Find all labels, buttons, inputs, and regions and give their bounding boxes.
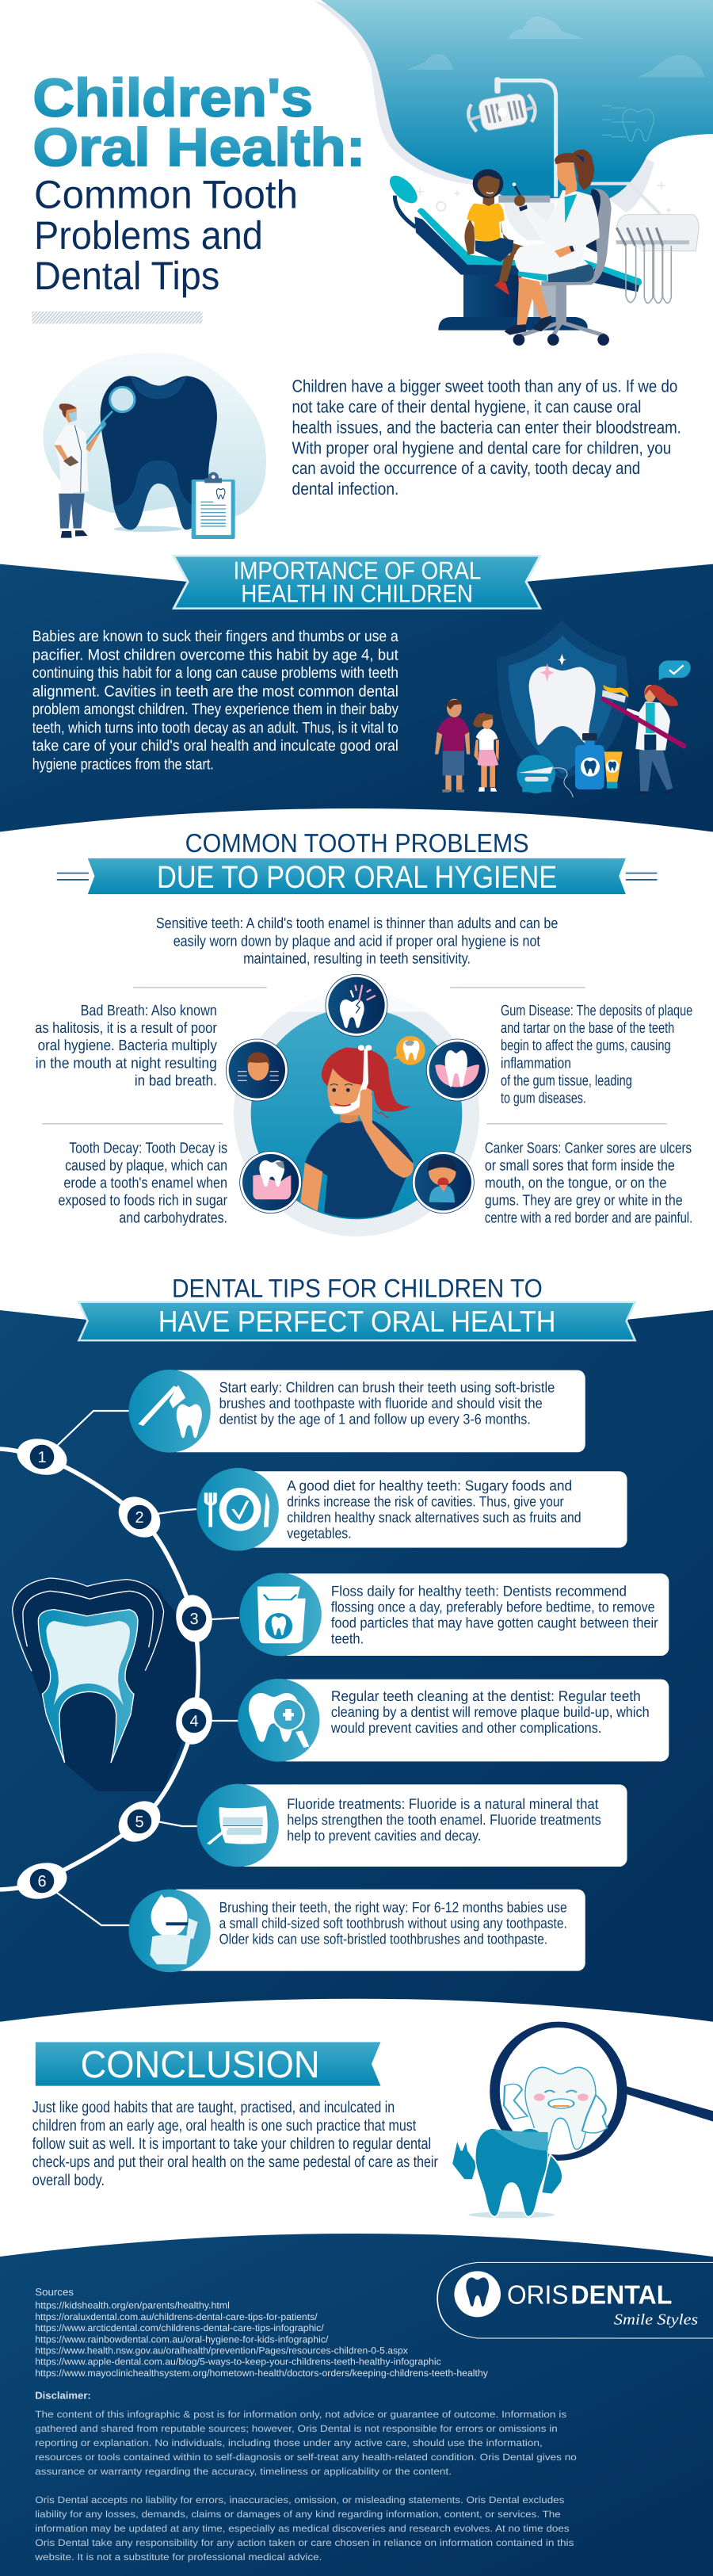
number 6: 6	[37, 1873, 47, 1890]
card: floss daily	[239, 1573, 669, 1656]
badge: sensitive tooth	[326, 974, 387, 1036]
dental unit	[616, 215, 699, 303]
badge: gum disease	[426, 1039, 488, 1101]
connector path	[0, 1411, 239, 1925]
panel: dental tips band background	[0, 1310, 713, 2022]
badge: canker sores	[412, 1152, 474, 1213]
text: tooth decay: Tooth Decay: Tooth Decay is	[69, 1139, 227, 1156]
text: sensitive teeth	[156, 915, 558, 967]
icon: teeth with applicator	[208, 1806, 268, 1844]
title	[32, 67, 365, 298]
text: bad breath: oral hygiene. Bacteria multiply	[38, 1037, 217, 1053]
illustration: family, dentist and shield	[435, 621, 691, 797]
text: gum disease: to gum diseases.	[501, 1089, 586, 1106]
card: start early	[128, 1370, 585, 1453]
number 1	[13, 1433, 71, 1481]
card: regular teeth cleaning	[238, 1679, 669, 1762]
sources list: https://www.apple-dental.com.au/blog/5-ways-to-keep-your-childrens-teeth-healthy-infographic	[35, 2356, 441, 2367]
number 4	[173, 1695, 215, 1747]
panel: importance of oral health	[32, 555, 542, 772]
heading: common tooth problems: COMMON TOOTH PROBLEMS	[185, 828, 529, 858]
mouthwash	[575, 733, 604, 789]
icon: floss box	[257, 1587, 306, 1643]
disclaimer: website. It is not a substitute for professional medical advice.	[35, 2551, 322, 2563]
intro text block: dental infection.	[292, 480, 398, 499]
sources list: https://www.arcticdental.com/childrens-dental-care-tips-infographic/	[35, 2322, 324, 2333]
card: fluoride treatments: help to prevent cavities and decay.	[287, 1827, 481, 1844]
child	[464, 169, 531, 296]
text: tooth decay: caused by plaque, which can	[65, 1156, 227, 1174]
banner heading: HEALTH IN CHILDREN	[241, 579, 473, 607]
conclusion text block: overall body.	[32, 2171, 105, 2188]
banner heading	[172, 555, 542, 610]
girl	[473, 713, 499, 792]
number 3: 3	[189, 1611, 199, 1628]
panel: conclusion	[32, 2024, 713, 2218]
floss	[517, 755, 573, 797]
intro text block	[292, 376, 681, 499]
card: brushing their teeth	[128, 1890, 585, 1972]
text: bad breath: in bad breath.	[135, 1072, 217, 1089]
title: Oral Health:	[32, 117, 365, 178]
chair	[385, 171, 642, 331]
sources list: https://www.rainbowdental.com.au/oral-hygiene-for-kids-infographic/	[35, 2333, 328, 2345]
sources list	[35, 2287, 488, 2379]
icon: plate and cutlery	[206, 1488, 269, 1531]
text: bad breath	[35, 1002, 217, 1089]
text: bad breath: as halitosis, it is a result of poor	[35, 1019, 217, 1036]
text: canker soars	[485, 1139, 692, 1225]
number 6	[13, 1857, 71, 1905]
panel: footer band background	[0, 2234, 713, 2576]
card: a good diet: vegetables.	[287, 1525, 352, 1542]
sources list: https://oraluxdental.com.au/childrens-dental-care-tips-for-patients/	[35, 2311, 318, 2322]
panel: dental tips	[0, 1274, 669, 1972]
stool	[513, 189, 612, 346]
logo: Oris Dental: ORIS	[507, 2280, 569, 2310]
panel: importance band background	[0, 564, 713, 832]
disclaimer: assurance or warranty regarding the accuracy, timeliness or applicability or the content.	[35, 2466, 452, 2477]
banner: have perfect oral health	[78, 1301, 637, 1341]
icon: tooth and magnifier	[249, 1693, 309, 1748]
central diagram: person with toothache and five badges	[226, 967, 488, 1236]
number 1: 1	[37, 1449, 47, 1466]
importance text block: hygiene practices from the start.	[32, 755, 214, 772]
importance text block: continuing this habit for a long can cause problems with teeth	[32, 663, 398, 681]
number 2: 2	[135, 1509, 144, 1527]
disclaimer	[35, 2391, 577, 2563]
number 5: 5	[135, 1814, 144, 1831]
text: tooth decay: erode a tooth's enamel when	[63, 1174, 227, 1191]
toothpaste	[604, 751, 623, 789]
banner: conclusion: CONCLUSION	[81, 2043, 320, 2085]
title: Problems and	[34, 213, 263, 258]
importance text block: alignment. Cavities in teeth are the most common dental	[32, 682, 398, 699]
panel: footer	[35, 2262, 713, 2563]
illustration: dentist and child at dental chair	[385, 77, 699, 346]
title: Dental Tips	[34, 254, 219, 298]
sources list: https://kidshealth.org/en/parents/healthy.html	[35, 2300, 230, 2310]
number 5	[110, 1793, 169, 1850]
boy	[435, 699, 470, 793]
text: bad breath: Bad Breath: Also known	[81, 1002, 217, 1019]
badge: tooth decay	[240, 1152, 302, 1213]
illustration: large tooth outline and connector path	[12, 1578, 201, 1791]
dentist	[505, 149, 600, 335]
text: tooth decay: and carbohydrates.	[119, 1209, 227, 1225]
text: tooth decay: exposed to foods rich in sugar	[58, 1191, 227, 1208]
text: gum disease	[501, 1002, 692, 1106]
importance text block: take care of your child's oral health and inculcate good oral	[32, 736, 398, 754]
banner heading: IMPORTANCE OF ORAL	[233, 556, 481, 584]
text: sensitive teeth: maintained, resulting in teeth sensitivity.	[243, 950, 471, 967]
sources list: https://www.health.nsw.gov.au/oralhealth/prevention/Pages/resources-children-0-5.aspx	[35, 2345, 408, 2356]
sources list: Sources	[35, 2287, 74, 2298]
icon: toothbrush and tooth	[138, 1385, 202, 1438]
number 3	[173, 1592, 215, 1645]
card: floss daily: teeth.	[331, 1630, 364, 1646]
panel: common tooth problems	[35, 828, 692, 1225]
tips heading and first three cards	[78, 1274, 669, 1656]
card: fluoride treatments	[197, 1784, 627, 1867]
title: Common Tooth	[34, 172, 298, 216]
hero sky shape	[313, 0, 713, 212]
illustration: dentist examining large tooth	[43, 353, 266, 539]
importance text block	[32, 627, 398, 772]
text: tooth decay	[58, 1139, 227, 1225]
number 2	[110, 1489, 169, 1546]
importance text block: problem amongst children. They experience them in their baby	[32, 700, 398, 717]
icon: child brushing	[150, 1894, 198, 1964]
importance text block: pacifier. Most children overcome this habit by age 4, but	[32, 645, 398, 663]
clipboard	[192, 472, 235, 539]
importance text block: Babies are known to suck their fingers and thumbs or use a	[32, 627, 398, 644]
text: bad breath: in the mouth at night resulting	[36, 1054, 217, 1072]
banner: conclusion	[36, 2042, 380, 2086]
hatch divider	[32, 311, 202, 323]
dentist with toothbrush	[601, 685, 686, 795]
logo: Oris Dental	[437, 2262, 713, 2338]
last three cards	[128, 1679, 669, 1972]
text: gum disease: inflammation	[501, 1054, 571, 1072]
importance text block: teeth, which turns into tooth decay as an adult. Thus, is it vital to	[32, 718, 398, 736]
panel: hero and introduction	[32, 67, 681, 499]
illustration: tooth mascots and mirror	[452, 2024, 713, 2218]
conclusion text block	[32, 2098, 438, 2188]
card: a good diet	[197, 1468, 627, 1551]
number 4: 4	[189, 1713, 199, 1730]
badge: bad breath	[226, 1039, 288, 1101]
title: Children's	[32, 67, 313, 128]
disclaimer: Disclaimer:	[35, 2391, 91, 2402]
